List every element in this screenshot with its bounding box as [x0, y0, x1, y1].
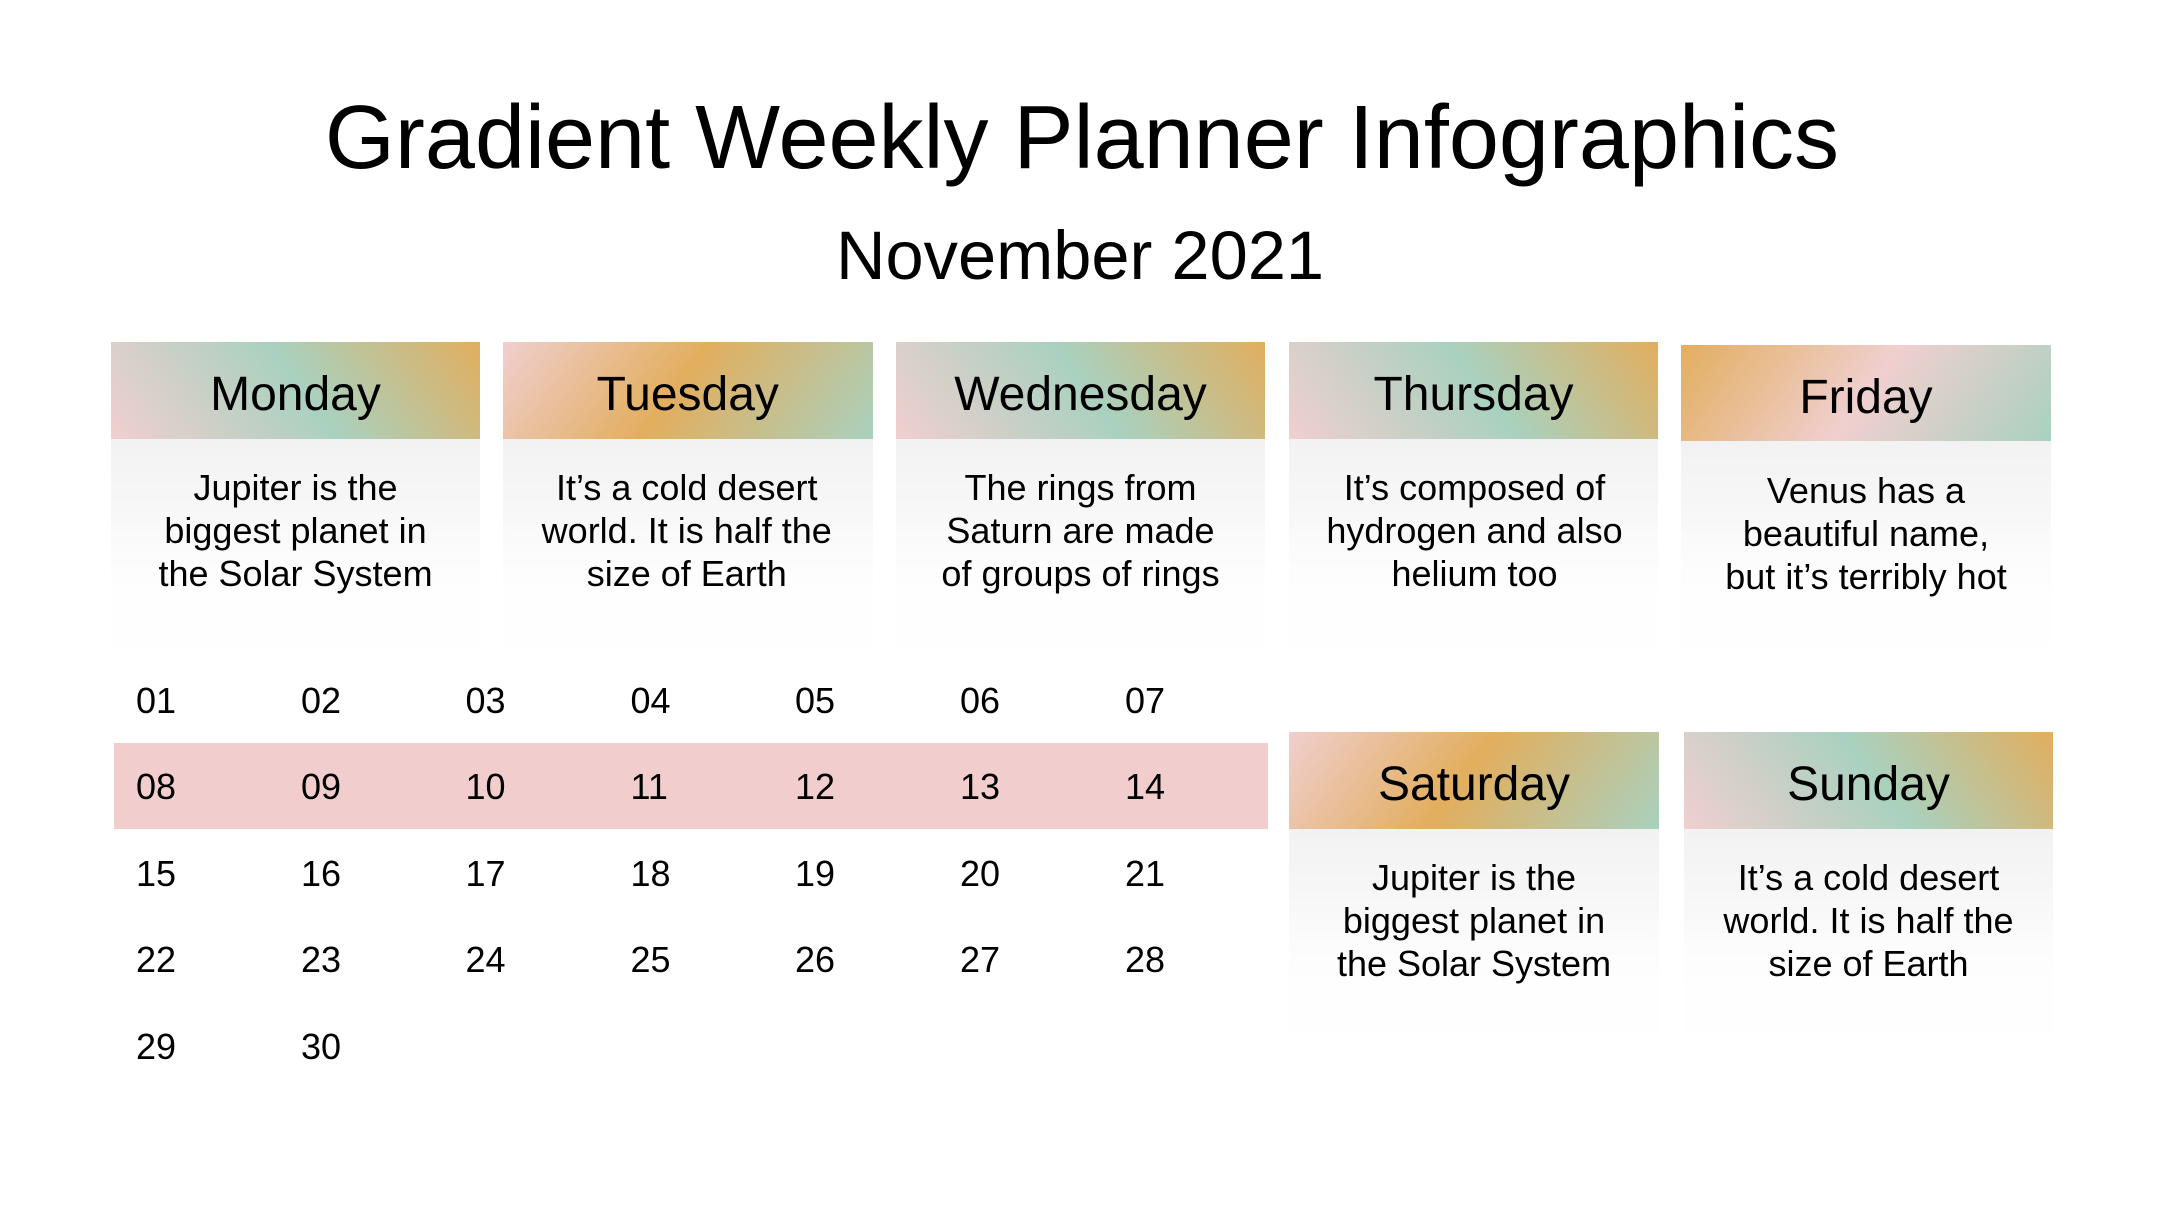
- Monday header: Monday: [210, 368, 381, 421]
- week 2 row: [136, 766, 1165, 807]
- week 2 row: 08: [136, 766, 176, 807]
- week 2 row: 13: [960, 766, 1000, 807]
- Thursday header: Thursday: [1373, 368, 1574, 421]
- Wednesday description: Saturn are made: [946, 510, 1215, 551]
- subtitle: November 2021: [836, 217, 1324, 294]
- panel: Saturday: [1289, 732, 1659, 984]
- week 1 row: 01: [136, 680, 176, 721]
- week 1 row: [136, 680, 1165, 721]
- Thursday header: [1289, 342, 1658, 439]
- Monday description: biggest planet in: [164, 510, 427, 551]
- week 1 row: 04: [630, 680, 671, 721]
- week 4 row: 26: [795, 939, 835, 980]
- week 4 row: [136, 939, 1165, 980]
- week 5 row: 30: [301, 1026, 341, 1066]
- highlighted week band: [114, 743, 1268, 829]
- Wednesday description: [896, 439, 1265, 663]
- Wednesday description: of groups of rings: [941, 553, 1220, 594]
- Monday description: [111, 439, 480, 663]
- Saturday header: [1289, 732, 1659, 829]
- title: Gradient Weekly Planner Infographics: [325, 88, 1839, 188]
- Sunday description: [1684, 829, 2053, 1053]
- week 3 row: 19: [795, 853, 835, 894]
- week 3 row: [136, 853, 1165, 894]
- panel: Monday: [111, 342, 480, 594]
- Wednesday header: [896, 342, 1265, 439]
- Friday description: [1681, 441, 2051, 665]
- Tuesday description: [502, 439, 873, 663]
- week 1 row: 02: [301, 680, 341, 721]
- Sunday description: size of Earth: [1768, 943, 1969, 984]
- week 4 row: 23: [301, 939, 341, 980]
- week 2 row: 12: [795, 766, 835, 807]
- week 1 row: 07: [1125, 680, 1165, 721]
- Monday header: [111, 342, 480, 439]
- panel: Wednesday: [896, 342, 1265, 594]
- week 3 row: 15: [136, 853, 176, 894]
- panel: Tuesday: [503, 342, 873, 594]
- week 1 row: 03: [466, 680, 506, 721]
- Tuesday header: [502, 342, 873, 439]
- Thursday description: It’s composed of: [1344, 467, 1605, 508]
- Monday description: Jupiter is the: [193, 467, 398, 508]
- week 3 row: 18: [630, 853, 671, 894]
- Tuesday header: Tuesday: [597, 368, 779, 421]
- Thursday description: [1289, 439, 1658, 663]
- panel: Thursday: [1289, 342, 1658, 594]
- week 5 row: 29: [136, 1026, 176, 1066]
- week 5 row: [136, 1026, 341, 1066]
- Saturday description: [1289, 829, 1659, 1053]
- panel: Friday: [1681, 345, 2051, 597]
- Wednesday description: The rings from: [964, 467, 1197, 508]
- panel: Sunday: [1684, 732, 2053, 984]
- Thursday description: helium too: [1391, 553, 1558, 594]
- week 3 row: 21: [1125, 853, 1165, 894]
- Friday description: beautiful name,: [1743, 513, 1989, 554]
- Sunday description: world. It is half the: [1723, 900, 2014, 941]
- week 2 row: 09: [301, 766, 341, 807]
- Friday description: but it’s terribly hot: [1725, 556, 2007, 597]
- Saturday description: Jupiter is the: [1372, 857, 1576, 898]
- week 3 row: 17: [466, 853, 506, 894]
- Saturday description: the Solar System: [1337, 943, 1611, 984]
- Tuesday description: size of Earth: [587, 553, 787, 594]
- week 4 row: 22: [136, 939, 176, 980]
- week 4 row: 28: [1125, 939, 1165, 980]
- Saturday description: biggest planet in: [1343, 900, 1605, 941]
- week 4 row: 24: [466, 939, 506, 980]
- calendar dates: [114, 680, 1268, 1066]
- week 2 row: 11: [630, 766, 668, 807]
- Sunday header: Sunday: [1787, 758, 1950, 811]
- Friday description: Venus has a: [1767, 470, 1965, 511]
- Tuesday description: It’s a cold desert: [556, 467, 817, 508]
- Friday header: [1681, 345, 2051, 441]
- Friday header: Friday: [1799, 371, 1933, 424]
- Sunday header: [1684, 732, 2053, 829]
- week 2 row: 14: [1125, 766, 1165, 807]
- Sunday description: It’s a cold desert: [1738, 857, 1999, 898]
- Thursday description: hydrogen and also: [1326, 510, 1623, 551]
- Monday description: the Solar System: [158, 553, 433, 594]
- week 2 row: 10: [466, 766, 506, 807]
- week 3 row: 16: [301, 853, 341, 894]
- Tuesday description: world. It is half the: [542, 510, 832, 551]
- Wednesday header: Wednesday: [954, 368, 1207, 421]
- week 1 row: 05: [795, 680, 835, 721]
- week 3 row: 20: [960, 853, 1000, 894]
- week 4 row: 27: [960, 939, 1000, 980]
- week 4 row: 25: [630, 939, 671, 980]
- week 1 row: 06: [960, 680, 1000, 721]
- Saturday header: Saturday: [1378, 758, 1570, 811]
